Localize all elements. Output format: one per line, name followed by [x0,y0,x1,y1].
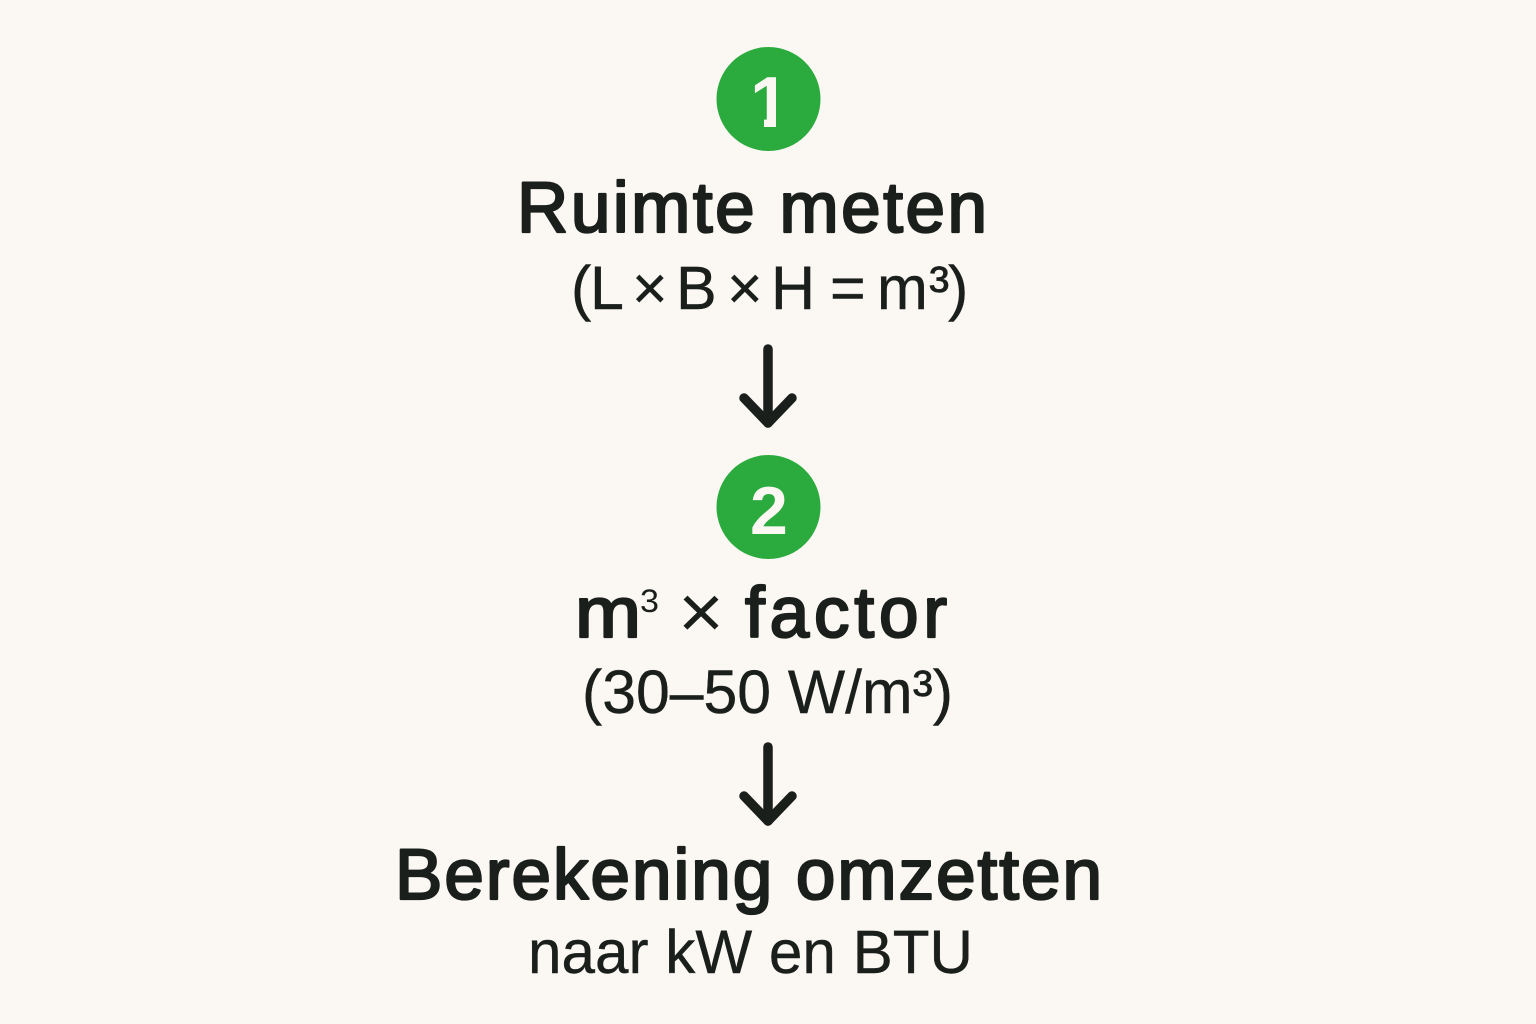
heading: m3 x factor: 3 [640,583,659,619]
arrow: step 2 to result [744,747,792,821]
formula: room volume: × [632,254,668,322]
formula: room volume: m [877,254,928,322]
subheading: naar kW en BTU: naar kW en BTU [528,918,973,986]
formula: room volume: × [727,254,763,322]
formula: room volume: = [830,254,866,322]
heading: m3 x factor: m [575,574,641,653]
step 1 badge: 1 [750,63,790,143]
step 2 badge: 2 [750,473,788,549]
heading: m3 x factor: factor [745,574,947,653]
arrow: step 1 to step 2 [744,349,792,423]
heading: Ruimte meten: Ruimte meten [517,169,987,248]
step 1 badge [716,47,820,151]
heading: Berekening omzetten: Berekening omzetten [395,836,1102,915]
formula: room volume: H [771,254,815,322]
step 2 badge [716,455,820,559]
formula: room volume: ) [948,254,968,322]
heading: m3 x factor [575,570,947,655]
formula: room volume: ( [571,254,591,322]
formula: room volume: L [590,254,624,322]
formula: room volume: B [676,254,717,322]
heading: m3 x factor: × [678,570,724,655]
formula: room volume: ³ [929,254,949,322]
formula: watt per cubic metre: (30–50 W/m³) [582,658,953,726]
